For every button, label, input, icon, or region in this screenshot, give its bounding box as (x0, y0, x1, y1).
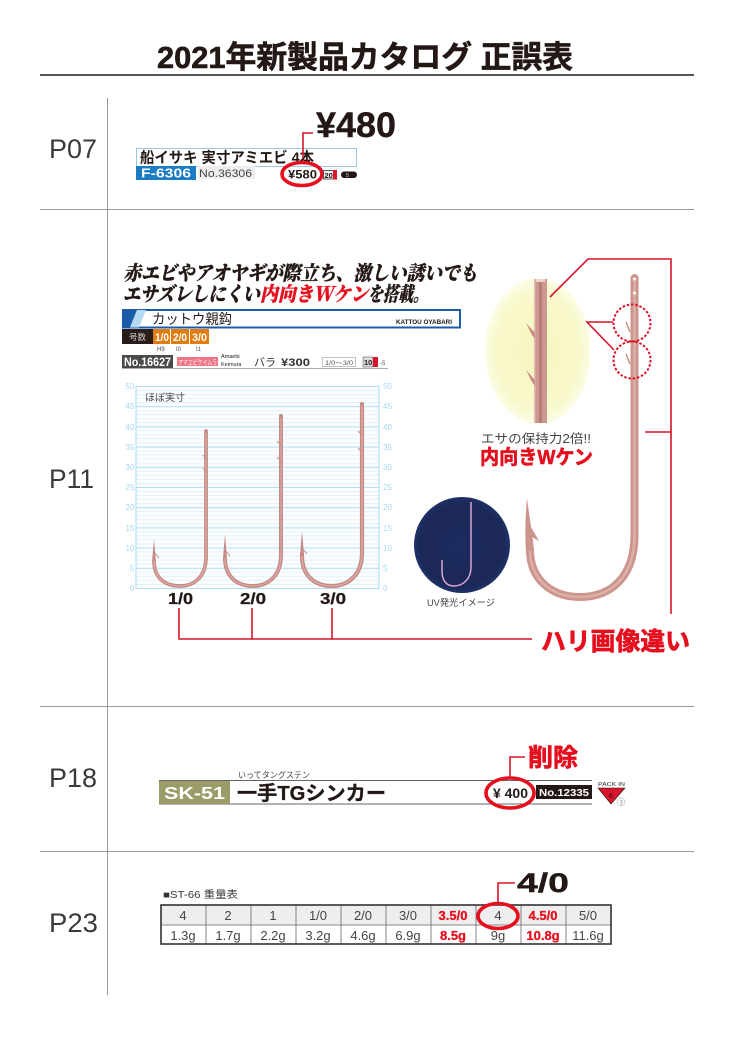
scale labels left: 20 (126, 503, 135, 512)
weight table: 3.2g (305, 928, 331, 943)
headline: を搭載。 (367, 278, 433, 307)
panel: P11 correction (118, 257, 690, 656)
page label: P18: P18 (49, 763, 97, 793)
weight table: 3/0 (399, 908, 417, 923)
scale labels left: 10 (126, 544, 135, 553)
scale labels right: 5 (383, 564, 388, 573)
product title bar (123, 310, 460, 328)
headline (118, 257, 482, 307)
headline: 内向きWケン (259, 278, 373, 307)
scale labels right (383, 382, 392, 593)
weight table: 5/0 (579, 908, 597, 923)
product code F-6306: F-6306 (141, 166, 191, 180)
size label 2/0: 2/0 (240, 591, 266, 608)
leader from size labels (179, 608, 532, 639)
weight table: 1/0 (309, 908, 327, 923)
pack-in icon (598, 782, 625, 806)
product spec row: Amaebi (221, 354, 240, 360)
life-size scale chart (126, 382, 392, 593)
size chips: 2/0 (173, 332, 187, 344)
table caption: ■ST-66 重量表 (163, 888, 238, 901)
callout: inward W barb: 内向きWケン (480, 446, 593, 469)
price circled (486, 778, 534, 808)
life-size scale chart: ほぼ実寸 (145, 391, 185, 404)
size chips: H9 (157, 347, 165, 353)
page label: P23: P23 (49, 908, 98, 938)
product code F-6306 (136, 166, 196, 180)
leader line (303, 133, 313, 158)
product name box: 船イサキ 実寸アミエビ 4本 (140, 148, 314, 166)
leader line (498, 883, 515, 904)
product spec row: Keimura (221, 362, 242, 368)
scale labels left: 40 (126, 423, 135, 432)
scale labels right: 20 (383, 503, 392, 512)
scale labels left: 0 (130, 584, 135, 593)
page frame lines (40, 75, 694, 995)
product spec row: バラ (254, 356, 276, 369)
product spec row: アマエビケイムラ (178, 358, 217, 366)
callout: delete: 削除 (528, 744, 579, 772)
pack-in icon: PACK IN (598, 782, 625, 788)
leader lines to hook (550, 259, 671, 614)
scale labels right: 30 (383, 463, 392, 472)
size chips: 3/0 (192, 332, 207, 344)
size chips: I0 (176, 347, 182, 353)
hook 2/0 (223, 416, 281, 586)
pack icons: 20 (324, 171, 333, 180)
product spec row: 10 (364, 358, 372, 367)
hook 3/0 (300, 404, 362, 586)
weight table: 4.6g (350, 928, 376, 943)
product bar: 一手TGシンカー (237, 782, 386, 805)
scale labels right: 10 (383, 544, 392, 553)
scale labels left: 25 (126, 483, 135, 492)
page label: P07: P07 (49, 134, 97, 164)
weight table: 10.8g (526, 928, 560, 943)
pack icons: 5 (346, 173, 349, 179)
product spec row: No.16627 (124, 357, 171, 369)
scale labels right: 35 (383, 443, 392, 452)
weight table: 1 (269, 908, 277, 923)
pack icons (324, 170, 357, 180)
weight table: 6.9g (395, 928, 421, 943)
product spec row: 1/0～3/0 (325, 360, 353, 367)
scale labels left (126, 382, 135, 593)
product title bar: KATTOU OYABARI (396, 319, 452, 326)
weight table: 8.5g (440, 928, 466, 943)
hook 1/0 (152, 431, 206, 586)
product spec row: ¥300 (281, 357, 310, 369)
weight table: 3.5/0 (439, 908, 467, 923)
weight table: 2 (224, 908, 232, 923)
hook barb enlarged view (485, 278, 591, 424)
weight table: 1.7g (215, 928, 241, 943)
corrected price: ¥480 (316, 106, 396, 145)
product title bar: カットウ親鈎 (152, 311, 232, 327)
scale labels right: 50 (383, 382, 392, 391)
headline: エサズレしにくい (122, 278, 265, 307)
scale labels right: 40 (383, 423, 392, 432)
product number: No.12335 (539, 787, 589, 799)
callout: 4/0: 4/0 (517, 868, 569, 898)
callout: wrong hook image: ハリ画像違い (541, 628, 690, 656)
leader line (510, 757, 525, 778)
size label 1/0: 1/0 (168, 591, 193, 608)
size circled (478, 904, 518, 928)
price circled: ¥ 400 (493, 786, 528, 801)
size label 3/0: 3/0 (320, 591, 346, 608)
weight table (161, 905, 611, 944)
UV glow image (414, 497, 510, 593)
product bar: SK-51 (164, 783, 225, 803)
pack-in icon: 3 (620, 800, 624, 806)
panel: P07 correction (136, 106, 396, 186)
product subtitle: いってタングステン (238, 770, 310, 780)
scale labels right: 25 (383, 483, 392, 492)
size chips: I1 (196, 347, 202, 353)
scale labels left: 15 (126, 524, 135, 533)
size chips: 1/0 (155, 332, 169, 344)
weight table: 4 (494, 908, 502, 923)
large hook (525, 278, 636, 597)
old price circled: ¥580 (288, 170, 317, 182)
panel: P23 correction (161, 868, 611, 944)
weight table: 11.6g (572, 928, 604, 943)
scale labels left: 45 (126, 402, 135, 411)
dashed highlight circles (614, 304, 650, 378)
product spec row (122, 354, 388, 369)
title: 2021年新製品カタログ 正誤表 (157, 40, 573, 75)
old price circled (282, 162, 322, 186)
scale labels right: 45 (383, 402, 392, 411)
weight table: 4.5/0 (529, 908, 557, 923)
scale labels right: 0 (383, 584, 388, 593)
page label: P11: P11 (49, 464, 94, 494)
weight table: 4 (179, 908, 187, 923)
scale labels left: 30 (126, 463, 135, 472)
size chips (122, 329, 209, 353)
headline: 赤エビやアオヤギが際立ち、激しい誘いでも (122, 257, 482, 286)
caption: UV: UV発光イメージ (427, 597, 495, 609)
scale labels left: 5 (130, 564, 135, 573)
product spec row: -5 (380, 361, 386, 367)
product number: No.36306 (199, 168, 252, 180)
caption: bait holding power: エサの保持力2倍!! (481, 431, 591, 446)
pack-in icon: 6 (609, 793, 613, 800)
panel: P18 correction (159, 744, 625, 808)
weight table: 2/0 (354, 908, 372, 923)
weight table: 9g (491, 928, 505, 943)
product bar (159, 780, 592, 805)
weight table: 1.3g (170, 928, 196, 943)
scale labels left: 50 (126, 382, 135, 391)
size chips: 号数 (129, 332, 147, 342)
weight table: 2.2g (260, 928, 286, 943)
scale labels left: 35 (126, 443, 135, 452)
scale labels right: 15 (383, 524, 392, 533)
